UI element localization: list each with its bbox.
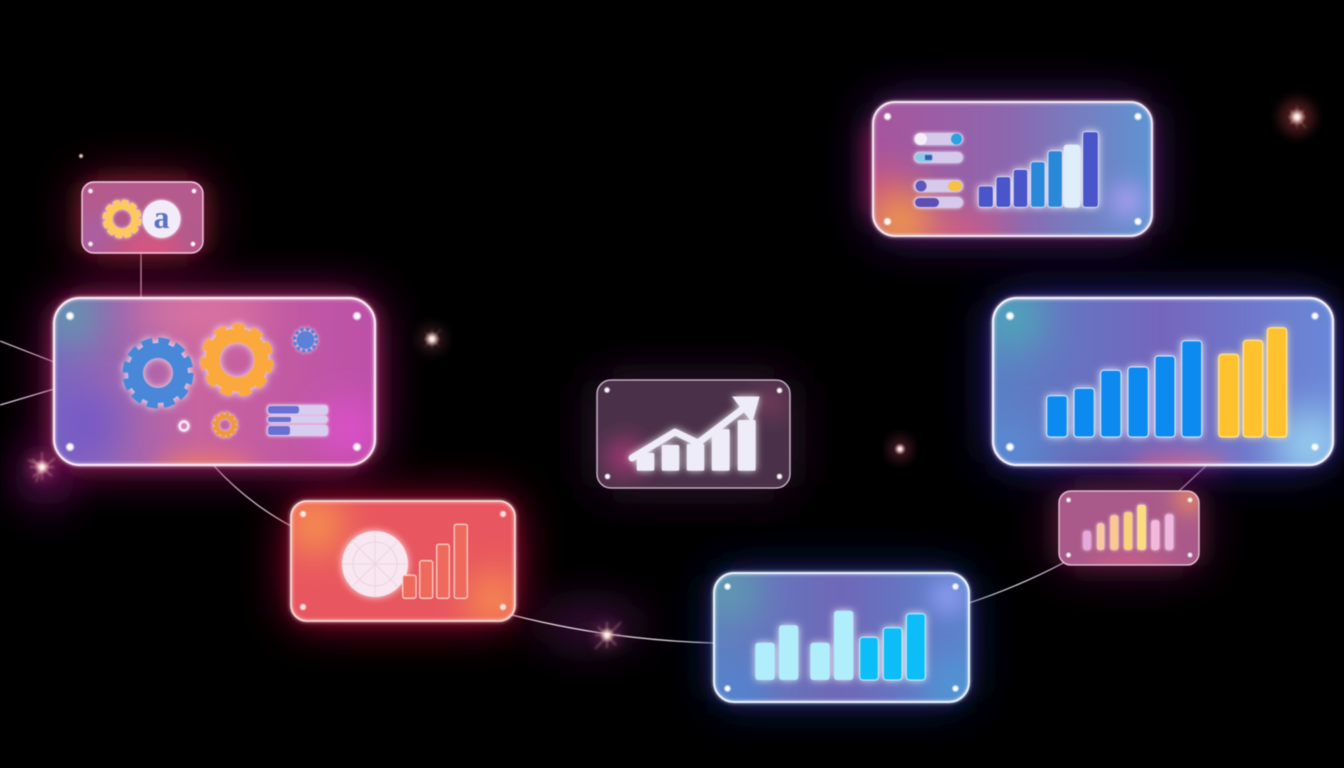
panel: blue bar chart: [706, 566, 974, 712]
ambient glow: lower connector: [535, 601, 645, 649]
icon: small blue gear: [294, 329, 316, 351]
icon: large blue gear: [126, 341, 190, 405]
panel: top right toggles and bars: [862, 102, 1152, 252]
icon: tiny ring gear: [180, 422, 188, 430]
sparkle: lower left: [28, 452, 56, 482]
bar chart: [978, 132, 1098, 207]
icon: yellow gear: [104, 202, 140, 236]
icon: large orange gear: [204, 327, 270, 393]
connector: radar panel to blue chart panel: [512, 615, 714, 643]
connector: left edge upper line: [0, 341, 54, 362]
toggle controls: [914, 133, 963, 208]
bar chart with rising arrow: [632, 397, 759, 471]
panel: right bar chart: [980, 286, 1344, 481]
ambient glow: lower left: [13, 443, 77, 507]
connector: blue chart panel to small bar panel: [969, 562, 1065, 603]
panel: radar and bars: [289, 499, 518, 624]
panel: small gear tag: [77, 182, 203, 264]
bar chart: blue series: [1047, 341, 1202, 437]
bar chart: pastel: [1083, 505, 1173, 550]
sparkle: top right: [1279, 99, 1315, 135]
icon: small orange gear: [214, 414, 236, 436]
bar chart: yellow series: [1219, 328, 1287, 437]
panel: small pastel bars: [1059, 484, 1204, 575]
icon: letter badge: a: [154, 199, 170, 235]
sparkle: small upper left: [78, 153, 84, 159]
sparkle: on lower connector: [593, 621, 621, 649]
bar chart: cyan series: [860, 614, 925, 680]
connector: small bar panel to right chart panel: [1179, 466, 1206, 491]
progress bars: [267, 405, 328, 436]
sparkle: center right: [888, 437, 912, 461]
panel: center growth chart: [597, 380, 790, 488]
connector: left edge lower line: [0, 389, 54, 405]
sparkle: near main gear panel: [418, 325, 446, 353]
bar chart: pale series: [755, 611, 853, 680]
connector: main gear panel to radar panel: [214, 466, 291, 526]
icon: radar disc: [342, 531, 408, 597]
connector: gear tag to main gear panel: [140, 253, 142, 298]
bar chart: outlined: [403, 524, 467, 598]
panel: main gears: [40, 285, 375, 482]
